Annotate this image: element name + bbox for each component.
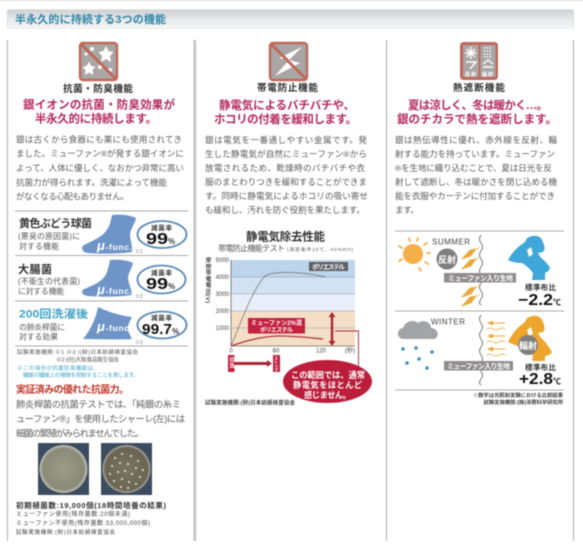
callout: 感じません。 — [304, 390, 351, 400]
label: polyester — [309, 262, 348, 271]
title: antistatic: 帯電防止機能 — [257, 82, 318, 94]
result: winter: +2.8 — [519, 371, 553, 388]
row: e. coli: 大腸菌 — [18, 262, 52, 276]
callout: この範囲では、通常 — [291, 370, 365, 380]
connector line — [335, 331, 358, 368]
row: after 200 washes: の肺炎桿菌に — [19, 322, 65, 332]
text: heat shielding — [395, 134, 557, 215]
test notes: 繊維の繊維上の増殖を抑制することを表します。 — [23, 371, 139, 379]
heading: heat shielding: 夏は涼しく、冬は暖かく…。 — [408, 98, 548, 112]
result: winter — [519, 362, 561, 388]
icon: sock 2 — [82, 260, 133, 297]
icon: rain drops — [401, 346, 434, 370]
text: heat shielding: 能を衣服やカーテンに付加することができ — [395, 190, 555, 201]
start marker: 印加 — [228, 356, 235, 369]
row: staphylococcus: 対する機能 — [19, 241, 59, 251]
caption: petri dish results: 試験実施機関:(財)日本紡績検査協会 — [16, 528, 115, 536]
curve: polyester — [231, 272, 326, 346]
label: summer: SUMMER — [432, 238, 470, 246]
wavy fabric line — [480, 235, 482, 305]
panel: antibacterial — [7, 36, 194, 541]
label bar: fabric: ミューファン入り生地 — [447, 362, 510, 370]
panel: heat shielding — [386, 36, 574, 541]
winter diagram — [398, 315, 561, 388]
label: polyester: ポリエステル — [312, 263, 346, 271]
test notes: 試験実施機関:※1 ※3 /(財)日本紡績検査協会 — [17, 348, 138, 356]
badge: 99% — [138, 266, 186, 294]
photo: petri dish with mu-func — [38, 443, 89, 495]
badge: 99%: % — [168, 282, 175, 291]
row: staphylococcus: (悪臭の原因菌)に — [18, 231, 80, 241]
y axis label: 摩擦帯電電圧(V) — [204, 256, 211, 303]
test notes: ※この場合の抗菌防臭機能は、 — [17, 364, 99, 372]
chart subtitle: 帯電防止機能テスト — [218, 243, 285, 253]
panel: antistatic — [195, 36, 386, 541]
stop marker: ストップ — [274, 356, 279, 373]
label: mu-fan polyester: ポリエステル — [260, 326, 293, 334]
arrow: start to stop — [234, 360, 272, 367]
chart title: 静電気除去性能 — [246, 230, 326, 244]
heading: antistatic: 静電気によるバチバチや、 — [219, 98, 355, 112]
heading: antistatic: ホコリの付着を緩和します。 — [214, 112, 357, 126]
result: summer: −2.2 — [518, 292, 553, 309]
heading: antibacterial: 銀イオンの抗菌・防臭効果が — [23, 98, 176, 112]
text: proven: 肺炎桿菌の抗菌テストでは、「純銀の糸ミ — [16, 398, 181, 410]
summer diagram — [399, 235, 561, 309]
x axis ticks: 0 — [229, 348, 233, 354]
badge: 99.7%: 99.7 — [142, 321, 172, 338]
chart subtitle — [218, 243, 353, 253]
text: proven — [16, 398, 185, 438]
row: staphylococcus: ※1 — [135, 249, 143, 255]
text: antibacterial: 銀は古くから食器にも薬にも使用されてき — [16, 134, 182, 144]
text: antibacterial: がなくなる心配もありません。 — [16, 190, 129, 202]
radiated rays — [487, 320, 505, 352]
y axis ticks: 1000 — [216, 326, 230, 332]
y axis ticks: 5000 — [216, 258, 230, 264]
title: antibacterial: 抗菌・防臭機能 — [63, 83, 133, 95]
test notes — [17, 348, 139, 379]
text: antibacterial: ました。ミューファン®が発する銀イオンに — [16, 148, 184, 158]
curve: mu-fan — [231, 336, 323, 346]
notes: heat shielding: 試験実施機関:(株)消費科学研究所 — [484, 398, 564, 406]
icon: sock 3 — [83, 307, 132, 339]
result: summer: ℃ — [553, 298, 561, 307]
row: e. coli: に対する機能 — [18, 286, 64, 296]
label: mu-fan polyester — [248, 318, 305, 334]
caption: petri dish results: ミューファン使用(残存菌数:20個未満) — [16, 510, 130, 518]
reflected rays — [462, 247, 480, 306]
label bar: fabric — [444, 273, 516, 282]
title: heat shielding: 熱遮断機能 — [453, 82, 505, 94]
text: antibacterial: 抗菌力が得られます。洗濯によって機能 — [16, 176, 167, 188]
text: antistatic: も緩和し、汚れを防ぐ役割を果たします。 — [205, 204, 365, 215]
caption: petri dish results: ミューファン不使用(残存菌数:33,000,000個) — [16, 519, 150, 527]
result: summer: 標準布比 — [525, 282, 556, 292]
chart source: 試験実施機関:(財)日本紡績検査協会 — [205, 398, 295, 406]
row: e. coli: μ-func. — [96, 282, 132, 297]
badge: 99% — [138, 221, 186, 248]
icon: heat shielding — [460, 42, 498, 80]
result: winter: 標準布比 — [525, 362, 556, 372]
row: after 200 washes: 200回洗濯後 — [19, 306, 88, 320]
icon: cloud — [398, 321, 438, 339]
label bar: fabric: ミューファン入り生地 — [448, 274, 513, 282]
text: heat shielding: ®を生地に織り込むことで、夏は日光を反 — [395, 162, 552, 173]
text: heat shielding: 射して遮断し、冬は暖かさを閉じ込める機 — [395, 176, 557, 187]
chart: static removal performance — [204, 230, 372, 406]
badge: 99.7%: % — [172, 327, 179, 336]
text: antistatic: 放電されるため、乾燥時のバチバチや衣 — [205, 162, 365, 173]
badge: 99%: 99 — [146, 276, 168, 293]
badge: 99%: % — [168, 237, 175, 246]
row: after 200 washes: μ-func. — [96, 319, 132, 334]
y axis ticks: 3000 — [216, 292, 230, 298]
subheading: proven: 実証済みの優れた抗菌力。 — [16, 383, 129, 396]
figure: woman (orange) — [508, 316, 552, 361]
row: staphylococcus: 黄色ぶどう球菌 — [19, 216, 92, 230]
text: heat shielding: 銀は熱伝導性に優れ、赤外線を反射、輻 — [395, 134, 557, 145]
notes: heat shielding — [473, 391, 564, 406]
x axis ticks: (秒) — [345, 346, 355, 354]
header bar — [7, 10, 574, 28]
notes: heat shielding: ※数字は光照射実験における比較結果 — [473, 391, 564, 399]
x axis ticks: 120 — [316, 348, 327, 354]
badge: radiate — [518, 335, 538, 355]
chart subtitle: (測定条件20℃、40%RH) — [287, 246, 353, 253]
text: antistatic: 生した静電気が自然にミューファン®から — [205, 148, 367, 159]
icon: heat shielding: 反射 — [465, 71, 476, 78]
badge: 99%: 99 — [146, 231, 168, 248]
figure: woman (blue) — [508, 236, 550, 280]
text: proven: ューファン®」を使用したシャーレ(左)には — [16, 413, 185, 424]
text: antibacterial: よって、人体に優しく、なおかつ非常に高い — [16, 162, 184, 173]
text: heat shielding: 射する能力を持っています。ミューファン — [395, 148, 555, 159]
y axis ticks: 2000 — [216, 309, 230, 315]
icon: antistatic — [270, 43, 307, 80]
text: antistatic — [205, 134, 368, 215]
photo: petri dish without mu-func — [101, 443, 152, 495]
label bar: fabric — [444, 361, 513, 370]
badge: reflect — [436, 248, 458, 270]
row: staphylococcus: μ-func. — [96, 238, 132, 253]
text: heat shielding: ます。 — [395, 205, 419, 215]
y axis ticks — [216, 258, 230, 332]
label: mu-fan polyester: ミューファン2%混 — [251, 319, 302, 327]
text: antibacterial — [16, 134, 184, 202]
text: proven: 細菌の繁殖がみられませんでした。 — [16, 428, 144, 438]
badge: 99%: 減菌率 — [151, 223, 172, 232]
caption: petri dish results — [16, 500, 166, 536]
icon: antibacterial — [80, 43, 117, 80]
heading: antibacterial: 半永久的に持続します。 — [35, 112, 157, 126]
text: antistatic: 服のまとわりつきを緩和することができま — [205, 176, 367, 187]
heading: antibacterial — [23, 98, 176, 126]
result: winter: ℃ — [553, 377, 561, 386]
result: summer — [518, 282, 561, 309]
row: e. coli: ※2 — [135, 294, 143, 300]
badge: 99.7% — [138, 312, 186, 338]
label: winter: WINTER — [431, 318, 465, 326]
text: antistatic: 銀は電気を一番通しやすい金属です。発 — [205, 134, 367, 145]
heading: antistatic — [214, 98, 357, 126]
y axis ticks: 4000 — [216, 275, 230, 281]
icon: heat shielding: 輻射 — [482, 71, 493, 78]
row: e. coli: (不衛生の代表菌) — [18, 276, 80, 286]
callout: 静電気をほとんど — [293, 380, 363, 390]
heading: heat shielding: 銀のチカラで熱を遮断します。 — [397, 112, 557, 126]
stop marker — [273, 355, 280, 373]
row: after 200 washes — [19, 306, 186, 346]
row: e. coli — [18, 260, 186, 300]
arrow: range — [328, 312, 336, 346]
text: antistatic: す。同時に静電気によるホコリの吸い寄せ — [205, 190, 368, 201]
test notes: ※2 /(社)大阪食品衛生協会 — [56, 356, 119, 364]
x axis ticks — [229, 346, 355, 354]
wavy fabric line — [480, 315, 482, 385]
badge: 99%: 減菌率 — [151, 268, 172, 277]
badge: 99.7%: 減菌率 — [151, 313, 172, 322]
header bar: 半永久的に持続する3つの機能 — [15, 12, 166, 26]
icon: sun — [399, 238, 430, 271]
x axis ticks: 60 — [273, 348, 280, 354]
plot bands — [231, 260, 355, 346]
icon: sock 1 — [82, 215, 136, 254]
badge: reflect: 反射 — [438, 254, 456, 265]
heading: heat shielding — [397, 98, 557, 126]
row: after 200 washes: ※3 — [135, 340, 143, 346]
callout — [283, 360, 372, 403]
row: after 200 washes: 対する効果 — [19, 332, 58, 342]
caption: petri dish results: 初期植菌数:19,000個(18時間培養の結果) — [16, 500, 166, 510]
badge: radiate: 輻射 — [519, 340, 537, 351]
start marker — [228, 355, 235, 372]
row: staphylococcus — [18, 215, 186, 255]
